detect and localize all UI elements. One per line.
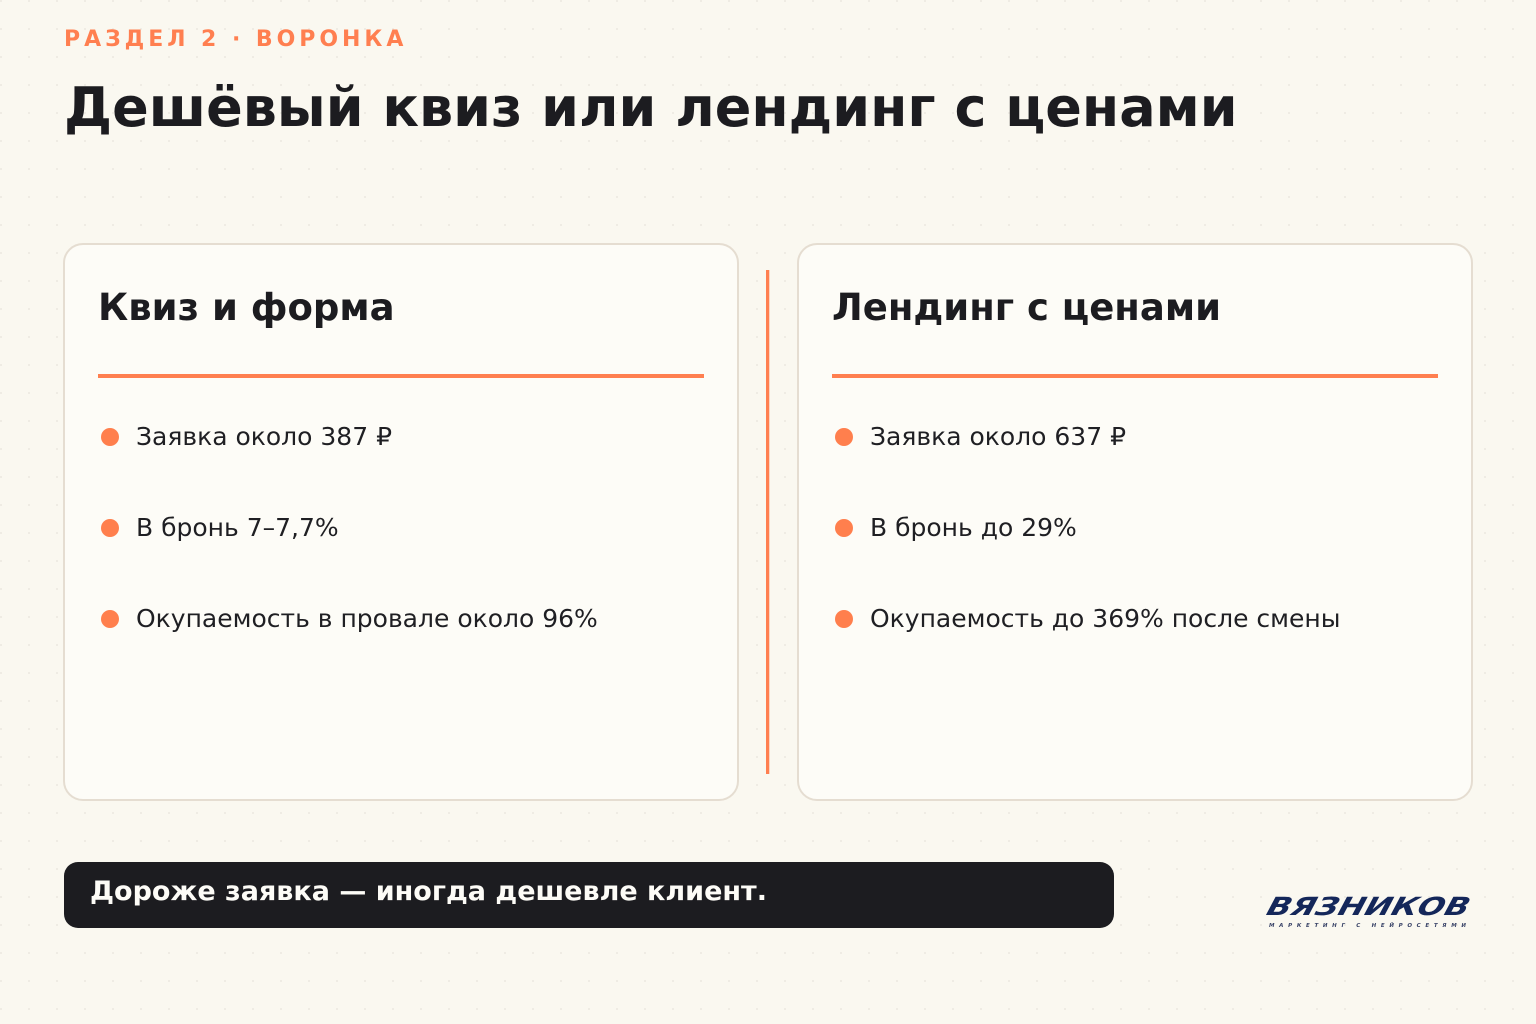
- bullet: lead cost: Заявка около 387 ₽: [136, 422, 392, 451]
- logo tagline: МАРКЕТИНГ С НЕЙРОСЕТЯМИ: [1269, 921, 1466, 929]
- heading rule: [832, 374, 1438, 378]
- vertical divider: [766, 270, 770, 774]
- heading rule: [98, 374, 704, 378]
- conclusion bar: [64, 862, 1114, 928]
- bullet: payback: Окупаемость в провале около 96%: [136, 604, 598, 633]
- panel: quiz and form: [63, 243, 739, 801]
- section label: РАЗДЕЛ 2 · ВОРОНКА: [64, 27, 407, 52]
- logo: [1260, 893, 1477, 929]
- bullet: booking rate: В бронь до 29%: [870, 513, 1077, 542]
- bullet: booking rate: В бронь 7–7,7%: [136, 513, 339, 542]
- panel: landing with prices: [797, 243, 1473, 801]
- panel heading: quiz: Квиз и форма: [98, 286, 395, 329]
- bullet: lead cost: Заявка около 637 ₽: [870, 422, 1126, 451]
- panel heading: landing: Лендинг с ценами: [832, 286, 1221, 329]
- title: Дешёвый квиз или лендинг с ценами: [64, 76, 1238, 139]
- conclusion bar: Дороже заявка — иногда дешевле клиент.: [90, 876, 767, 907]
- bullet: payback: Окупаемость до 369% после смены: [870, 604, 1340, 633]
- logo wordmark: ВЯЗНИКОВ: [1260, 893, 1477, 922]
